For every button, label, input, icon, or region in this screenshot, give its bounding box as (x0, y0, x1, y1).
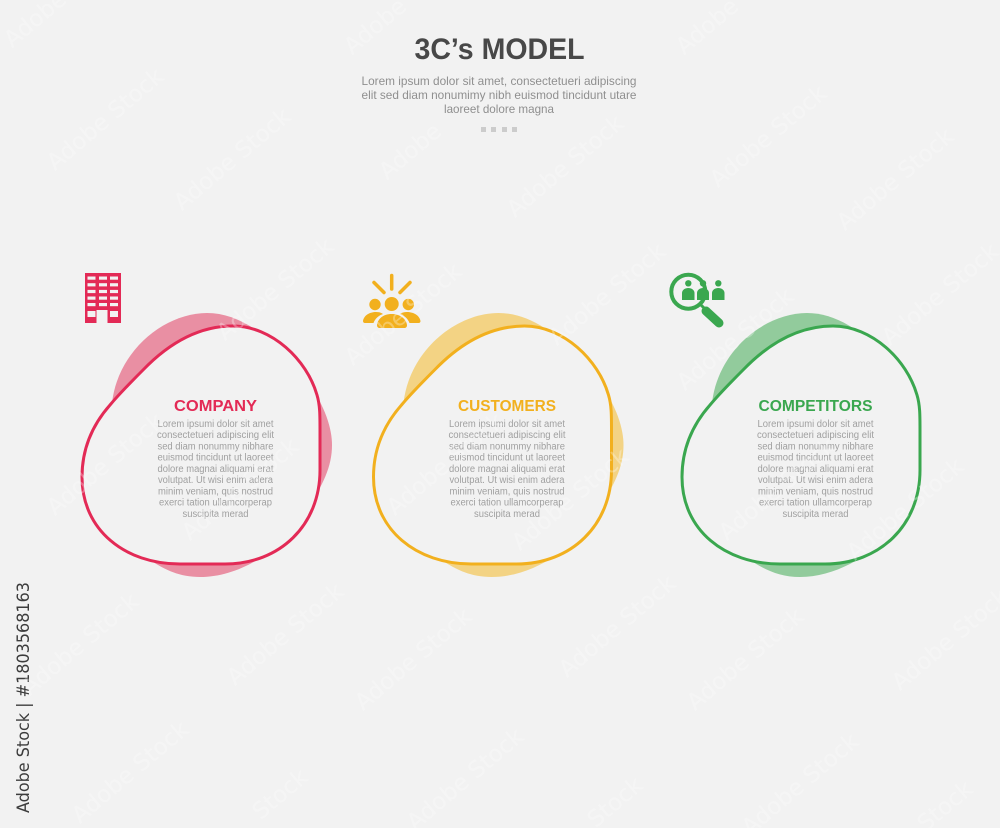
company body text: sed diam nonummy nibhare (158, 442, 274, 452)
company body text: minim veniam, quis nostrud (158, 486, 273, 498)
watermark pattern: Adobe Stock (17, 588, 144, 701)
customers body text: dolore magnai aliquami erat (449, 464, 565, 475)
customers body text: Lorem ipsumi dolor sit amet (449, 419, 565, 430)
competitors body text (757, 419, 874, 520)
watermark pattern: Adobe Stock (42, 408, 169, 521)
watermark pattern: Adobe (374, 118, 447, 185)
watermark pattern: Adobe Stock (169, 103, 296, 216)
watermark pattern: Adobe Stock (222, 578, 349, 691)
stock credit: Adobe Stock | #1803568163 (14, 582, 34, 813)
watermark pattern: Adobe Stock (67, 716, 194, 828)
title: 3C’s MODEL (414, 33, 584, 66)
competitors body text: Lorem ipsumi dolor sit amet (758, 419, 874, 430)
customers body text: volutpat. Ut wisi enim adera (450, 475, 565, 486)
company body text: Lorem ipsumi dolor sit amet (158, 419, 274, 430)
customers body text: suscipita merad (474, 509, 540, 520)
watermark pattern: Adobe Stock (42, 63, 169, 176)
competitors body text: suscipita merad (782, 509, 848, 520)
competitors body text: euismod tincidunt ut laoreet (758, 453, 874, 464)
company body text: exerci tation ullamcorperap (159, 498, 273, 509)
competitors body text: volutpat. Ut wisi enim adera (758, 475, 874, 486)
company outline blob (82, 326, 320, 564)
competitors outline blob (682, 326, 920, 564)
customers body text (448, 419, 566, 520)
panel: competitors (682, 313, 920, 577)
icon: magnifier over competitors (671, 275, 724, 323)
company heading: COMPANY (174, 398, 258, 415)
watermark pattern: Adobe Stock (502, 110, 629, 223)
icon: customer group (363, 276, 420, 328)
watermark pattern: Adobe Stock (705, 80, 832, 193)
watermark pattern: Adobe Stock (714, 433, 841, 546)
customers body text: consectetueri adipiscing elit (448, 430, 566, 441)
panel: customers (374, 313, 624, 577)
subtitle text block: laoreet dolore magna (444, 102, 554, 116)
customers heading: CUSTOMERS (458, 398, 556, 415)
watermark pattern: Adobe Stock (340, 258, 467, 371)
customers body text: exerci tation ullamcorperap (450, 498, 564, 509)
watermark pattern: Adobe Stock (544, 238, 671, 351)
customers body text: euismod tincidunt ut laoreet (449, 453, 565, 464)
competitors heading: COMPETITORS (758, 398, 872, 415)
company body text (157, 419, 274, 520)
company filled blob (112, 313, 332, 577)
competitors body text: exerci tation ullamcorperap (759, 498, 873, 509)
watermark pattern: Adobe Stock (507, 443, 634, 556)
watermark pattern: Adobe Stock (842, 453, 969, 566)
company body text: volutpat. Ut wisi enim adera (158, 475, 274, 486)
subtitle text block: elit sed diam nonumimy nibh euismod tincidunt utare (362, 88, 637, 102)
watermark pattern: Adobe Stock (832, 123, 959, 236)
watermark pattern: Adobe Stock (682, 603, 809, 716)
company body text: euismod tincidunt ut laoreet (158, 453, 274, 464)
subtitle text block (362, 74, 637, 116)
competitors body text: minim veniam, quis nostrud (758, 486, 873, 498)
watermark pattern: Adobe Stock (382, 408, 509, 521)
competitors body text: consectetueri adipiscing elit (757, 430, 874, 441)
watermark pattern: Adobe Stock (554, 570, 681, 683)
customers body text: sed diam nonummy nibhare (449, 442, 566, 452)
watermark pattern: Adobe Stock (177, 433, 304, 546)
watermark pattern: Adobe Stock (672, 283, 799, 396)
customers filled blob (404, 313, 624, 577)
watermark pattern: Stock (248, 764, 314, 825)
icon: office building (85, 273, 121, 323)
customers body text: minim veniam, quis nostrud (450, 486, 564, 498)
competitors body text: dolore magnai aliquami erat (758, 464, 874, 475)
company body text: suscipita merad (182, 509, 248, 520)
watermark pattern: Adobe Stock (350, 603, 477, 716)
company body text: consectetueri adipiscing elit (157, 430, 274, 441)
customers outline blob (374, 326, 612, 564)
pagination dots (481, 127, 517, 132)
competitors filled blob (712, 313, 900, 577)
subtitle text block: Lorem ipsum dolor sit amet, consectetueri adipiscing (362, 74, 636, 88)
competitors body text: sed diam nonummy nibhare (758, 442, 874, 452)
watermark pattern: Adobe Stock (212, 233, 339, 346)
panel: company (82, 313, 332, 577)
company body text: dolore magnai aliquami erat (158, 464, 274, 475)
